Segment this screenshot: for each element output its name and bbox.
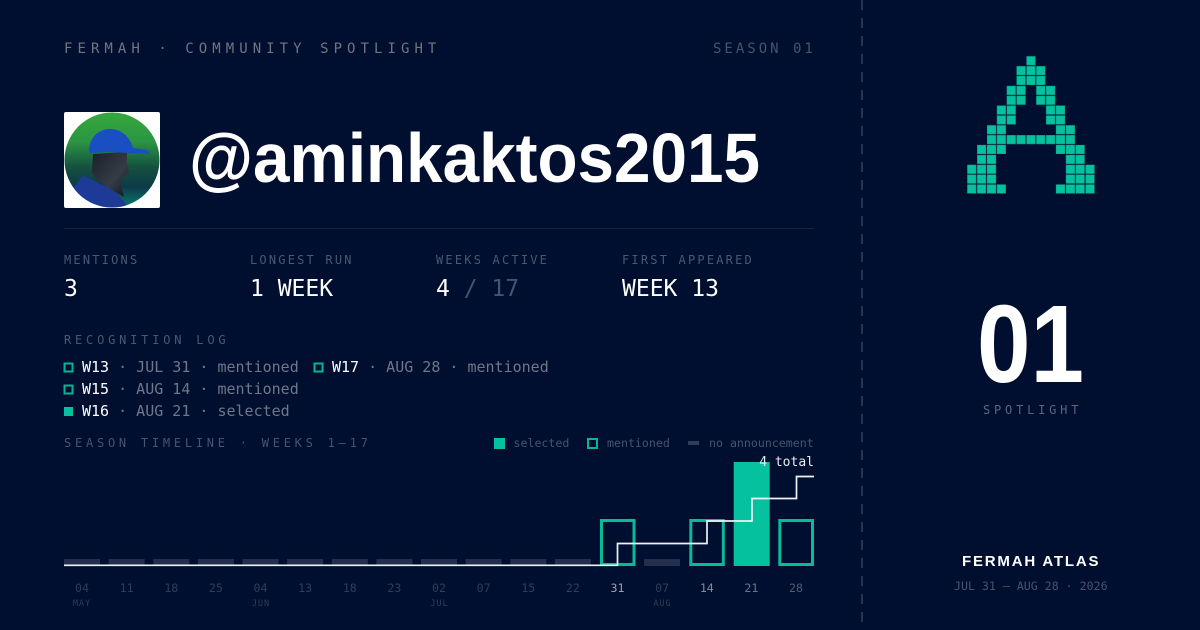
legend: selected: [514, 436, 569, 450]
rule: [64, 228, 814, 230]
axis labels: JUL: [430, 599, 449, 609]
empty weeks: [64, 559, 680, 566]
axis labels: 14: [700, 581, 714, 595]
legend: mentioned: [607, 436, 670, 450]
stat: first appeared: WEEK 13: [622, 276, 719, 302]
axis labels: AUG: [653, 599, 672, 609]
rank caption: SPOTLIGHT: [983, 403, 1082, 417]
recognition log heading: RECOGNITION LOG: [64, 333, 229, 347]
entry W17: W17 · AUG 28 · mentioned: [332, 358, 549, 376]
axis labels: 25: [209, 581, 223, 595]
stat: mentions: MENTIONS: [64, 253, 139, 267]
header: program name: FERMAH · COMMUNITY SPOTLIGHT: [64, 41, 441, 57]
axis labels: JUN: [252, 599, 270, 609]
axis labels: 28: [789, 581, 803, 595]
dashed divider: [861, 0, 863, 630]
total label: 4 total: [759, 455, 814, 470]
axis labels: 23: [387, 581, 401, 595]
big rank number: 01: [977, 283, 1084, 406]
stat: first appeared: FIRST APPEARED: [622, 253, 754, 267]
axis labels: [73, 581, 803, 609]
axis labels: 04: [254, 581, 267, 595]
stat: mentions: 3: [64, 276, 78, 302]
axis labels: 21: [744, 581, 758, 595]
pixel letter A logo: [968, 56, 1094, 193]
stat: longest run: 1 WEEK: [250, 276, 333, 302]
axis labels: 18: [164, 581, 178, 595]
axis labels: 11: [120, 581, 134, 595]
timeline chart: [64, 455, 814, 609]
footer brand: FERMAH ATLAS: [962, 553, 1100, 570]
footer dates: JUL 31 — AUG 28 · 2026: [954, 579, 1108, 593]
stat: longest run: LONGEST RUN: [250, 253, 354, 267]
axis labels: 31: [611, 581, 624, 595]
avatar: [64, 112, 160, 210]
stat: mentions: [64, 253, 139, 302]
axis labels: 13: [298, 581, 312, 595]
axis labels: MAY: [73, 599, 91, 609]
recognition log entries: [64, 358, 549, 420]
cumulative line: [64, 476, 814, 565]
entry W13: W13 · JUL 31 · mentioned: [82, 358, 299, 376]
stat: weeks active: [436, 253, 549, 302]
stat: weeks active: 4 / 17: [436, 276, 519, 302]
stat: first appeared: [622, 253, 754, 302]
mentioned bars: [602, 520, 812, 564]
axis labels: 22: [566, 581, 580, 595]
header: season: SEASON 01: [713, 41, 816, 57]
timeline heading: SEASON TIMELINE · WEEKS 1–17: [64, 436, 372, 450]
axis labels: 07: [477, 581, 491, 595]
stat: weeks active: WEEKS ACTIVE: [436, 253, 549, 267]
avatar head: [92, 152, 129, 197]
entry W15: W15 · AUG 14 · mentioned: [82, 380, 299, 398]
title handle: @aminkaktos2015: [189, 119, 760, 197]
entry W16: W16 · AUG 21 · selected: [82, 402, 290, 420]
axis labels: 15: [521, 581, 535, 595]
selected bar: [734, 462, 770, 566]
avatar shirt: [73, 175, 127, 210]
legend: [494, 436, 814, 450]
axis labels: 04: [75, 581, 89, 595]
avatar cap: [89, 129, 150, 154]
axis labels: 18: [343, 581, 357, 595]
axis labels: 02: [432, 581, 446, 595]
legend: no announcement: [709, 436, 814, 450]
stat: longest run: [250, 253, 354, 302]
axis labels: 07: [655, 581, 669, 595]
